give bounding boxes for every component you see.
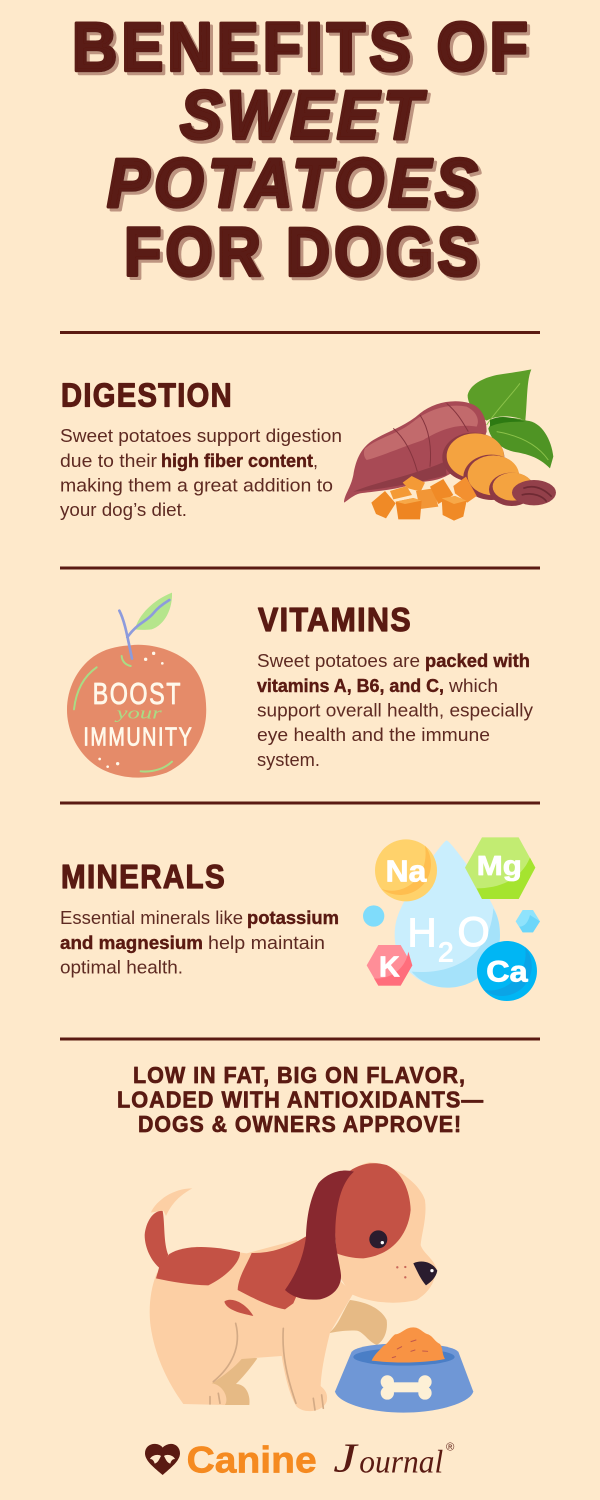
text block: vitamins: which [448, 676, 498, 696]
leaves [468, 369, 553, 468]
leaf [135, 593, 172, 630]
text block: vitamins: packed with [425, 651, 530, 671]
tail [151, 1188, 192, 1216]
bone [381, 1375, 432, 1400]
text block: digestion: high fiber content [161, 451, 313, 471]
title: FOR DOGS [124, 213, 482, 290]
magnesium [465, 837, 535, 899]
potassium [367, 945, 412, 986]
water drop: 2 [438, 937, 454, 968]
sodium [375, 839, 437, 901]
callout: LOW IN FAT, BIG ON FLAVOR, [133, 1062, 466, 1088]
icon: boost your immunity apple: your [114, 704, 162, 723]
water drop [395, 840, 500, 988]
text block: vitamins: eye health and the immune [257, 725, 490, 745]
calcium: Ca [486, 956, 528, 989]
title: SWEET [180, 76, 426, 153]
body [150, 1240, 353, 1411]
text block: minerals: and magnesium [60, 933, 203, 953]
icon: sweet potato [344, 369, 556, 521]
text block: minerals [60, 908, 339, 978]
bowl [335, 1327, 473, 1413]
text block: digestion: , [313, 451, 318, 471]
accents [74, 656, 172, 772]
text block: vitamins: vitamins A, B6, and C, [257, 676, 444, 696]
logo: canine journal: ® [446, 1441, 455, 1453]
saddle patch [238, 1236, 317, 1309]
text block: minerals: help maintain [208, 933, 325, 953]
small circle and hexagon [363, 905, 540, 932]
text block: vitamins: support overall health, especially [257, 700, 533, 720]
water drop: H [407, 910, 437, 956]
text block: vitamins: system. [257, 750, 320, 770]
text block: minerals: optimal health. [60, 958, 183, 978]
callout: DOGS & OWNERS APPROVE! [138, 1111, 462, 1137]
potato cubes [371, 476, 477, 521]
water drop: O [457, 908, 490, 955]
panel: vitamins [67, 593, 533, 778]
icon: boost your immunity apple: IMMUNITY [83, 722, 193, 752]
logo: canine journal: J [333, 1436, 360, 1482]
apple body [67, 645, 206, 778]
callout [117, 1062, 484, 1137]
title [72, 8, 532, 290]
icon: heart paw [145, 1444, 180, 1475]
illustration: puppy eating [145, 1162, 473, 1413]
title: POTATOES [107, 144, 482, 221]
heading: digestion: DIGESTION [61, 376, 233, 414]
text block: digestion: making them a great addition to [60, 476, 333, 496]
back patch [156, 1247, 240, 1285]
callout: LOADED WITH ANTIOXIDANTS— [117, 1086, 484, 1112]
icon: boost your immunity apple [67, 593, 206, 778]
potato body [344, 401, 487, 503]
logo: canine journal: ournal [359, 1444, 443, 1480]
text block: vitamins [257, 651, 533, 770]
text block: vitamins: Sweet potatoes are [257, 651, 420, 671]
panel: minerals [60, 837, 540, 1001]
text block: digestion: due to their [60, 451, 157, 471]
title: BENEFITS OF [72, 8, 532, 85]
lettering: BOOST [93, 677, 182, 711]
logo: canine journal [145, 1436, 455, 1482]
calcium [477, 941, 537, 1001]
head patch [333, 1163, 411, 1258]
text block: minerals: Essential minerals like [60, 908, 243, 928]
ear [285, 1170, 354, 1300]
leg shading [210, 1323, 323, 1410]
head [323, 1162, 437, 1303]
text block: digestion [60, 426, 342, 520]
potassium: K [379, 951, 400, 983]
far legs [210, 1300, 387, 1405]
heading: minerals: MINERALS [61, 858, 226, 895]
sodium: Na [386, 854, 427, 888]
nose [413, 1262, 437, 1285]
icon: mineral elements [363, 837, 540, 1001]
food [372, 1327, 445, 1362]
side spot [224, 1300, 253, 1316]
potato slices [442, 433, 504, 482]
text block: digestion: your dog’s diet. [60, 500, 187, 520]
panel: digestion [60, 369, 556, 521]
wordmark: Canine [187, 1439, 317, 1481]
tail patch [145, 1211, 168, 1268]
stem [119, 600, 169, 659]
magnesium: Mg [477, 850, 522, 881]
freckles [396, 1266, 406, 1278]
eye [369, 1230, 387, 1248]
text block: minerals: potassium [247, 908, 339, 928]
heading: vitamins: VITAMINS [258, 601, 412, 638]
text block: digestion: Sweet potatoes support digestion [60, 426, 342, 446]
